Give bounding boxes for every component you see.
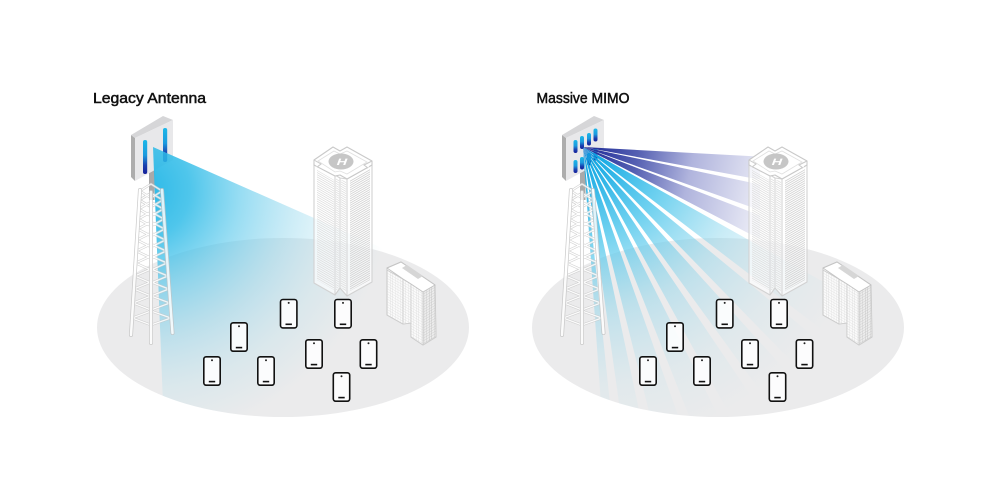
scene: legacy antenna xyxy=(94,92,469,417)
icon: tall building with helipad xyxy=(314,147,372,296)
phones: legacy xyxy=(204,300,377,401)
signal beam: single wide beam xyxy=(153,147,342,407)
icon: massive MIMO antenna panel xyxy=(562,116,604,200)
icon: lattice tower xyxy=(131,184,172,343)
ground ellipse: legacy xyxy=(97,238,469,417)
signal beams: purple beams to tall building xyxy=(583,147,760,239)
phones: MIMO xyxy=(640,300,813,401)
icon: legacy antenna panel xyxy=(131,116,173,200)
scene: massive MIMO xyxy=(532,91,904,446)
icon: tall building with helipad xyxy=(749,147,807,296)
signal beams: cyan beams to phones xyxy=(583,147,790,400)
ground ellipse: MIMO xyxy=(532,238,904,417)
icon: small building xyxy=(387,262,436,345)
heading: legacy antenna: Legacy Antenna xyxy=(93,91,207,107)
icon: lattice tower xyxy=(562,184,604,343)
heading: massive MIMO: Massive MIMO xyxy=(536,91,630,107)
icon: small building xyxy=(823,262,872,345)
